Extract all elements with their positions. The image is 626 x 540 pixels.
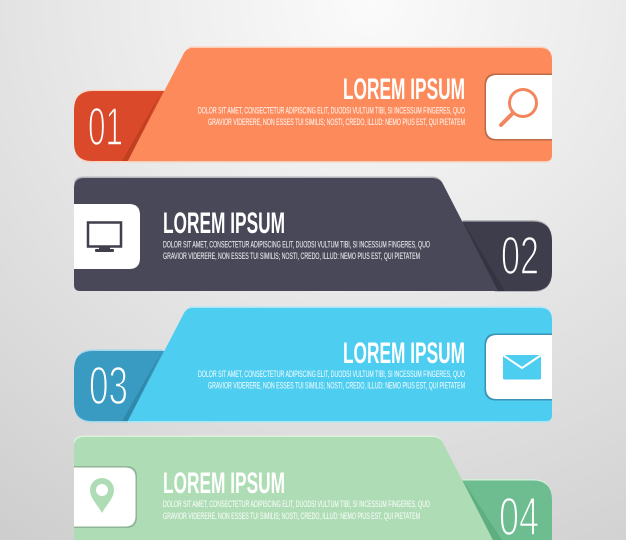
icon: location pin [74, 466, 137, 528]
panel: step 01 [74, 46, 552, 162]
heading 03: LOREM IPSUM [343, 337, 465, 370]
body text 02: DOLOR SIT AMET, CONSECTETUR ADIPISCING ELIT, DUODSI VULTUM TIBI, SI INCESSUM FINGERES, QUO [163, 240, 430, 250]
number tab 02 [460, 220, 552, 292]
number tab 04 [460, 479, 552, 540]
body text 04: DOLOR SIT AMET, CONSECTETUR ADIPISCING ELIT, DUODSI VULTUM TIBI, SI INCESSUM FINGERES, QUO [163, 499, 430, 509]
blue banner [128, 306, 552, 422]
dark banner [74, 176, 443, 184]
body text 01 [198, 106, 465, 127]
body text 04 [163, 499, 430, 521]
icon: envelope [484, 334, 552, 400]
heading 01: LOREM IPSUM [343, 73, 465, 106]
icon: monitor [74, 204, 140, 269]
body text 02: GRAVIOR VIDERERE, NON ESSES TUI SIMILIS; NOSTI, CREDO, ILLUD: NEMO PIUS EST, QUI PIETATEM [163, 251, 420, 261]
body text 04: GRAVIOR VIDERERE, NON ESSES TUI SIMILIS; NOSTI, CREDO, ILLUD: NEMO PIUS EST, QUI PIETATEM [163, 511, 420, 521]
panel: step 03 [74, 306, 552, 422]
icon: magnifier [484, 74, 552, 140]
number tab 01 [74, 90, 165, 162]
heading 02: LOREM IPSUM [163, 207, 285, 240]
panel: step 04 [74, 436, 552, 540]
orange banner [128, 46, 552, 162]
number tab 02: 02 [501, 226, 539, 286]
number tab 03 [74, 350, 165, 422]
heading 04: LOREM IPSUM [163, 467, 285, 500]
number tab 01: 01 [88, 97, 123, 157]
green banner [74, 436, 443, 443]
body text 03 [198, 369, 465, 390]
number tab 03: 03 [89, 356, 128, 416]
panel: step 02 [74, 176, 552, 292]
body text 02 [163, 240, 430, 261]
